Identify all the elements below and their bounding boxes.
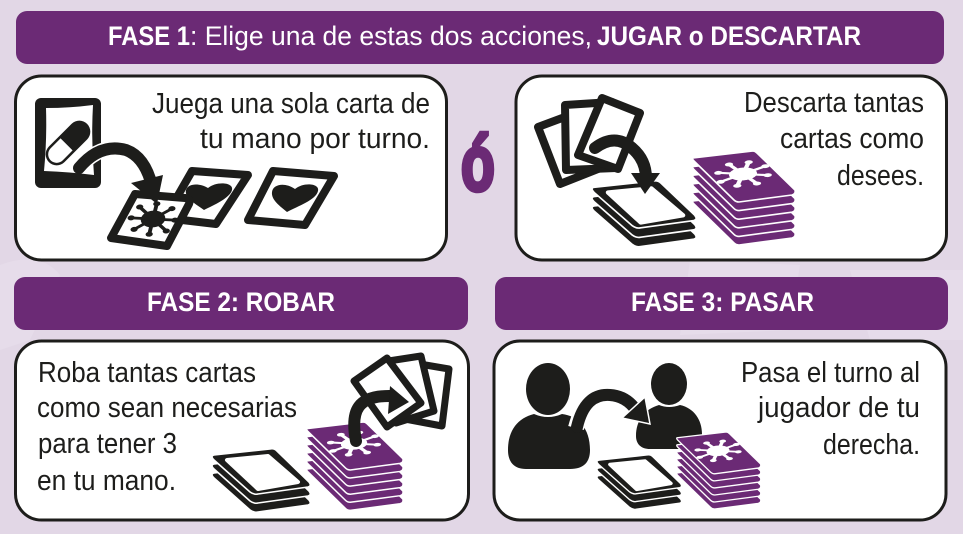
icon: discard pile (212, 449, 310, 512)
heading: fase 1: JUGAR o DESCARTAR (597, 21, 861, 51)
heading: fase 1 (16, 11, 944, 64)
heading: fase 3: FASE 3: PASAR (631, 287, 814, 317)
panel: pasar (494, 341, 946, 520)
text: descarta: Descarta tantas (744, 87, 924, 119)
icon: drawn cards (354, 356, 449, 427)
text: descarta (744, 87, 924, 192)
icon: pill card (35, 98, 101, 188)
text: roba: como sean necesarias (37, 392, 297, 424)
icon: player (508, 363, 590, 469)
arrow: pass turn (576, 395, 650, 428)
icon: purple deck (307, 422, 403, 510)
arrow: discard (595, 140, 660, 194)
text: pasa (741, 357, 920, 461)
text: roba: para tener 3 (38, 428, 177, 460)
panel: robar (16, 341, 468, 520)
icon: discard pile (592, 181, 696, 247)
icon: next player (636, 363, 702, 449)
heading: fase 1: : Elige una de estas dos acciones, (190, 21, 592, 51)
text: pasa: jugador de tu (757, 392, 920, 424)
text: descarta: desees. (837, 160, 924, 192)
icon: hand of cards (538, 98, 640, 184)
heading: fase 2: FASE 2: ROBAR (147, 287, 335, 317)
icon: purple deck (677, 432, 761, 509)
text: juega una carta (152, 88, 430, 155)
panel: jugar (16, 76, 446, 260)
panel: descartar (516, 76, 946, 260)
text: pasa: derecha. (823, 429, 920, 461)
text: juega una carta: Juega una sola carta de (152, 88, 430, 120)
icon: virus card (111, 194, 190, 246)
icon: purple deck (693, 151, 795, 245)
icon: heart card (248, 171, 334, 225)
heading: fase 2 (14, 277, 468, 330)
text: descarta: cartas como (780, 123, 924, 155)
arrow: play card (79, 148, 163, 204)
heading: fase 3 (495, 277, 948, 330)
text: roba (37, 357, 297, 497)
icon: heart card back (165, 171, 248, 224)
separator: o: ó (461, 120, 495, 207)
heading: fase 1: FASE 1 (108, 21, 190, 51)
icon: discard pile (597, 455, 682, 509)
text: roba: en tu mano. (37, 465, 176, 497)
text: roba: Roba tantas cartas (38, 357, 256, 389)
text: pasa: Pasa el turno al (741, 357, 920, 389)
arrow: draw (354, 386, 409, 441)
text: juega una carta: tu mano por turno. (200, 123, 430, 155)
